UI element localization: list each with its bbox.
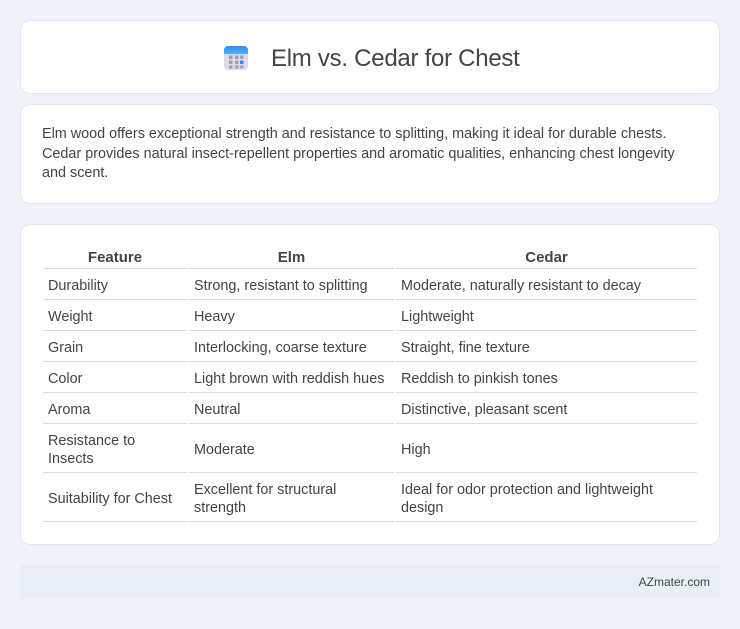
row: Color: Color bbox=[48, 371, 82, 387]
row: Weight: Weight bbox=[48, 309, 93, 325]
table card bbox=[20, 224, 720, 545]
summary card bbox=[20, 104, 720, 204]
row: Suitability for Chest: Suitability for Chest bbox=[48, 491, 172, 507]
comparison table: Strong, resistant to splitting bbox=[194, 278, 368, 294]
row: Grain: Grain bbox=[48, 340, 83, 356]
title: Elm vs. Cedar for Chest bbox=[271, 45, 520, 72]
comparison table: Excellent for structural bbox=[194, 482, 336, 498]
header: Feature: Feature bbox=[88, 249, 142, 266]
comparison table: Reddish to pinkish tones bbox=[401, 371, 558, 387]
comparison table: Interlocking, coarse texture bbox=[194, 340, 367, 356]
comparison table: strength bbox=[194, 500, 246, 516]
comparison table: Lightweight bbox=[401, 309, 474, 325]
comparison table: Straight, fine texture bbox=[401, 340, 530, 356]
comparison table: High bbox=[401, 442, 431, 458]
icon: calendar bbox=[224, 46, 248, 70]
footer bar bbox=[20, 565, 720, 599]
comparison table: Neutral bbox=[194, 402, 240, 418]
summary text: Cedar provides natural insect-repellent properties and aromatic qualities, enhancing chest longevity bbox=[42, 146, 675, 162]
summary text: Elm wood offers exceptional strength and resistance to splitting, making it ideal for durable chests. bbox=[42, 126, 666, 142]
row: Resistance to Insects: Resistance to bbox=[48, 433, 135, 449]
comparison table: Distinctive, pleasant scent bbox=[401, 402, 567, 418]
footer credit: AZmater.com bbox=[639, 575, 710, 589]
row: Aroma: Aroma bbox=[48, 402, 90, 418]
summary text bbox=[42, 126, 675, 181]
comparison table: design bbox=[401, 500, 443, 516]
header: Elm: Elm bbox=[278, 249, 305, 266]
comparison table: Moderate bbox=[194, 442, 255, 458]
title card bbox=[20, 20, 720, 94]
comparison table: Moderate, naturally resistant to decay bbox=[401, 278, 641, 294]
row: Durability: Durability bbox=[48, 278, 108, 294]
comparison table: Light brown with reddish hues bbox=[194, 371, 384, 387]
comparison table: Ideal for odor protection and lightweight bbox=[401, 482, 653, 498]
row: Resistance to Insects: Insects bbox=[48, 451, 94, 467]
row: Resistance to Insects bbox=[48, 433, 135, 467]
comparison table: Heavy bbox=[194, 309, 235, 325]
header: Cedar: Cedar bbox=[525, 249, 568, 266]
summary text: and scent. bbox=[42, 165, 108, 181]
